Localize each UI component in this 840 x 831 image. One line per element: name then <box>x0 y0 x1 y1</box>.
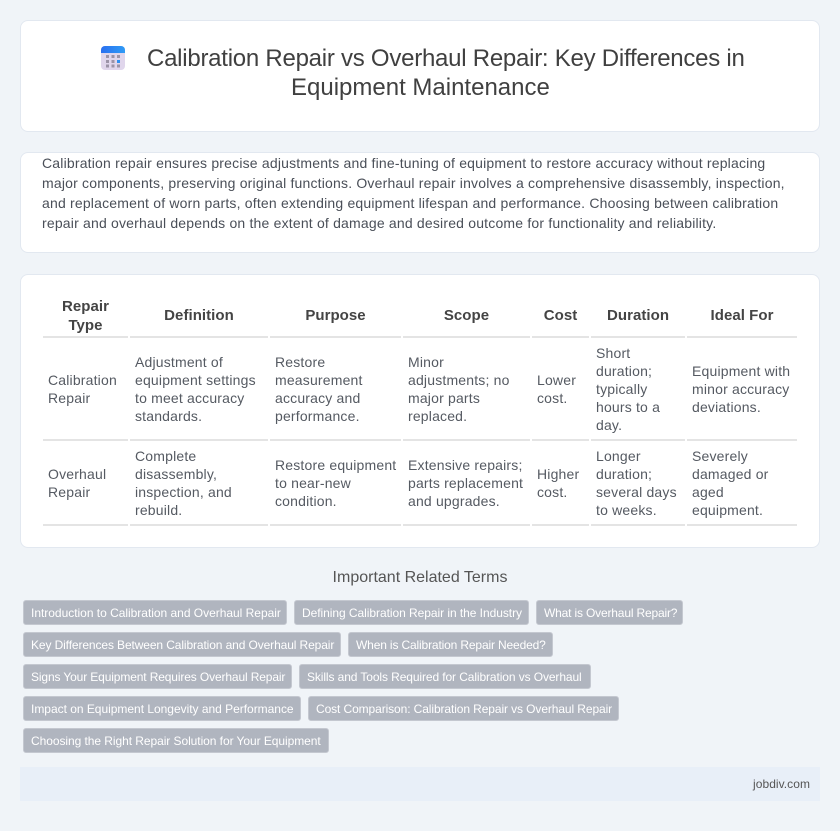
table row: Overhaul Repair: Repair <box>48 484 90 500</box>
panel: comparison table <box>20 274 820 548</box>
tag list: related terms: Impact on Equipment Longevity and Performance <box>31 702 294 716</box>
table row: Calibration Repair: duration; <box>596 363 652 379</box>
table row: Calibration Repair: minor accuracy <box>692 381 789 397</box>
table header <box>62 298 774 334</box>
table row: Overhaul Repair: Extensive repairs; <box>408 457 523 473</box>
table row: Overhaul Repair: disassembly, <box>135 466 217 482</box>
table row: Calibration Repair: to meet accuracy <box>135 390 244 406</box>
header: Definition: Definition <box>164 307 234 324</box>
title: Equipment Maintenance <box>291 74 550 101</box>
footer bar <box>20 767 820 801</box>
header: Purpose: Purpose <box>305 307 366 324</box>
table row: Calibration Repair <box>48 345 790 433</box>
table row: Calibration Repair: Restore <box>275 354 325 370</box>
panel: introduction <box>20 152 820 253</box>
table row: Calibration Repair: adjustments; no <box>408 372 510 388</box>
table row: Overhaul Repair: Higher <box>537 466 579 482</box>
tag list: related terms: Signs Your Equipment Requires Overhaul Repair <box>31 670 285 684</box>
table row: Calibration Repair: Minor <box>408 354 444 370</box>
table row: Overhaul Repair: condition. <box>275 493 337 509</box>
text block: introduction: major components, preserving original functions. Overhaul repair involves a comprehensive disassembly, inspection, <box>42 175 785 191</box>
header: Duration: Duration <box>607 307 669 324</box>
table row: Calibration Repair: hours to a <box>596 399 660 415</box>
table row: Overhaul Repair: to weeks. <box>596 502 657 518</box>
header: Repair Type: Repair <box>62 298 109 315</box>
table row: Calibration Repair: day. <box>596 417 622 433</box>
table row: Overhaul Repair: parts replacement <box>408 475 523 491</box>
table row: Overhaul Repair: aged <box>692 484 724 500</box>
tag list: related terms: What is Overhaul Repair? <box>544 606 677 620</box>
footer text: jobdiv.com <box>753 777 810 791</box>
heading: related terms: Important Related Terms <box>333 569 507 586</box>
table row: Overhaul Repair: rebuild. <box>135 502 182 518</box>
table row: Overhaul Repair: Restore equipment <box>275 457 396 473</box>
tag list: related terms: Cost Comparison: Calibration Repair vs Overhaul Repair <box>316 702 612 716</box>
panel: title header <box>20 20 820 132</box>
title <box>147 45 745 101</box>
table row: Calibration Repair: equipment settings <box>135 372 256 388</box>
table row: Overhaul Repair: cost. <box>537 484 567 500</box>
table row: Calibration Repair: cost. <box>537 390 567 406</box>
table row: Calibration Repair: Calibration <box>48 372 117 388</box>
table row: Overhaul Repair: damaged or <box>692 466 769 482</box>
table row: Calibration Repair: Short <box>596 345 630 361</box>
table row: Overhaul Repair: to near-new <box>275 475 351 491</box>
icon: calendar <box>101 46 125 70</box>
table row: Calibration Repair: Equipment with <box>692 363 790 379</box>
table row: Overhaul Repair: inspection, and <box>135 484 232 500</box>
table row: Overhaul Repair: Complete <box>135 448 196 464</box>
table row: Calibration Repair: replaced. <box>408 408 467 424</box>
header: Repair Type: Type <box>68 317 103 334</box>
text block: introduction <box>42 155 785 231</box>
table row: Calibration Repair: performance. <box>275 408 360 424</box>
tag list: related terms <box>23 600 683 753</box>
table row: Calibration Repair: major parts <box>408 390 480 406</box>
table row: Calibration Repair: standards. <box>135 408 202 424</box>
table row: Overhaul Repair <box>48 448 769 518</box>
tag list: related terms: When is Calibration Repair Needed? <box>356 638 546 652</box>
table row: Overhaul Repair: Longer <box>596 448 641 464</box>
table row: Overhaul Repair: equipment. <box>692 502 763 518</box>
table row: Calibration Repair: accuracy and <box>275 390 360 406</box>
text block: introduction: Calibration repair ensures precise adjustments and fine-tuning of equipment to restore accuracy without replacing <box>42 155 765 171</box>
table row: Overhaul Repair: duration; <box>596 466 652 482</box>
header: Cost: Cost <box>544 307 577 324</box>
table row: Calibration Repair: typically <box>596 381 647 397</box>
tag list: related terms: Defining Calibration Repair in the Industry <box>302 606 522 620</box>
table row: Overhaul Repair: and upgrades. <box>408 493 500 509</box>
tag list: related terms: Key Differences Between Calibration and Overhaul Repair <box>31 638 334 652</box>
table row: Overhaul Repair: Severely <box>692 448 748 464</box>
table row: Calibration Repair: measurement <box>275 372 363 388</box>
header: Ideal For: Ideal For <box>711 307 773 324</box>
title: Calibration Repair vs Overhaul Repair: Key Differences in <box>147 45 745 72</box>
table row: Calibration Repair: deviations. <box>692 399 761 415</box>
header: Scope: Scope <box>444 307 489 324</box>
text block: introduction: repair and overhaul depends on the extent of damage and desired outcome for functionality and reliability. <box>42 215 716 231</box>
table row: Calibration Repair: Repair <box>48 390 90 406</box>
tag list: related terms: Choosing the Right Repair Solution for Your Equipment <box>31 734 321 748</box>
table row: Overhaul Repair: several days <box>596 484 677 500</box>
table row: Overhaul Repair: Overhaul <box>48 466 106 482</box>
tag list: related terms: Skills and Tools Required for Calibration vs Overhaul <box>307 670 582 684</box>
table row: Calibration Repair: Lower <box>537 372 576 388</box>
header: Repair Type <box>62 298 109 334</box>
table row: Calibration Repair: Adjustment of <box>135 354 223 370</box>
tag list: related terms: Introduction to Calibration and Overhaul Repair <box>31 606 281 620</box>
text block: introduction: and replacement of worn parts, often extending equipment lifespan and performance. Choosing between calibration <box>42 195 778 211</box>
